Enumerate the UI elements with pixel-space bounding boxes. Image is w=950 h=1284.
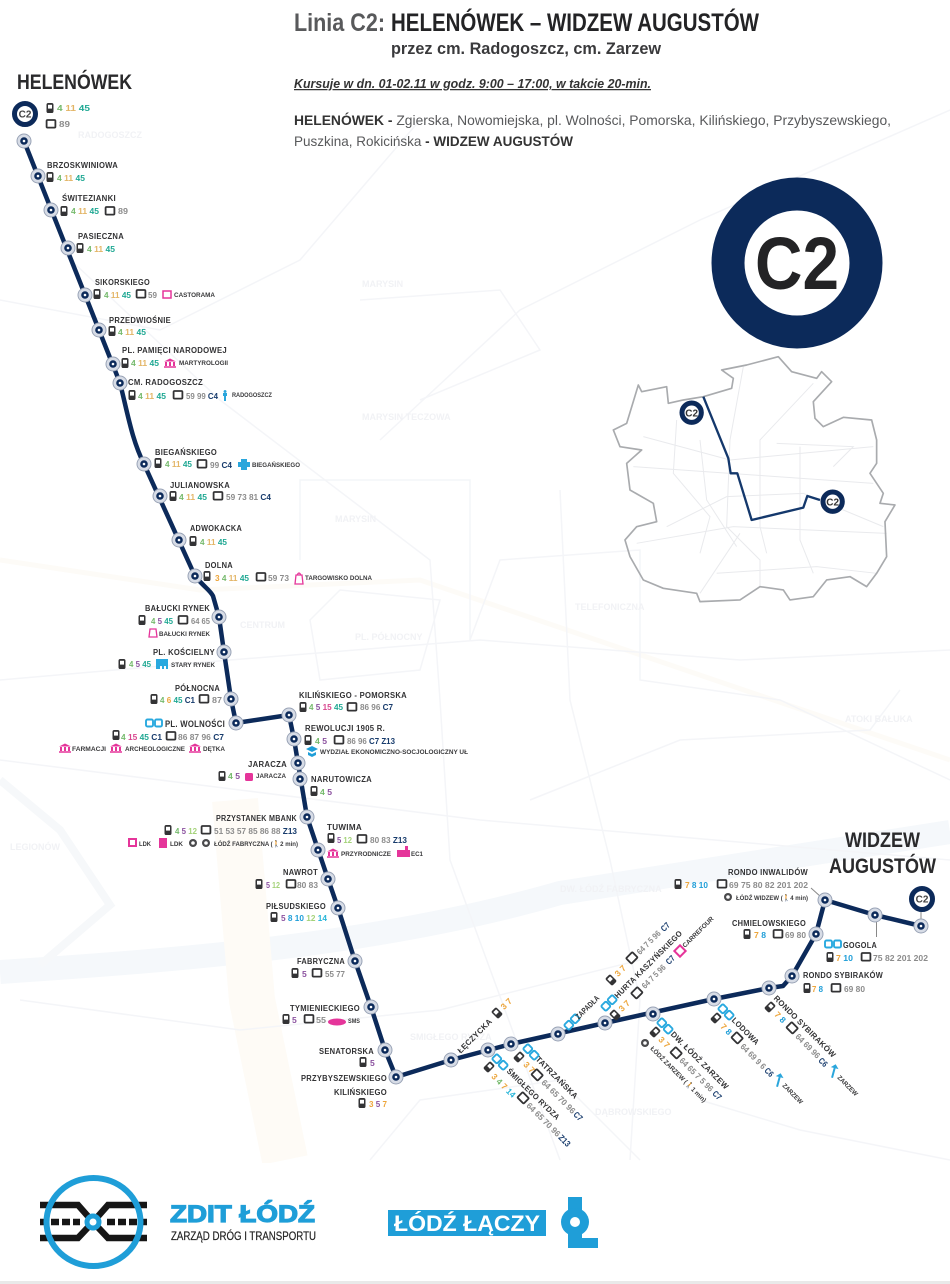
stop: Przedwiośnie: [92, 316, 171, 337]
ghost map labels: TELEFONICZNA: [575, 602, 645, 612]
stop: Lodowa: LODOWA: [730, 1016, 761, 1047]
stop: Tatrzańska: 64 65 70 96: [539, 1077, 578, 1116]
stop: Przybyszewskiego / Kilińskiego: PRZYBYSZEWSKIEGO: [301, 1074, 387, 1083]
stop: Cm. Radogoszcz: 59 99 C4: [186, 391, 218, 401]
stop: Tuwima: PRZYRODNICZE: [341, 851, 392, 858]
stop: Przystanek mBank: ŁÓDŹ FABRYCZNA (🚶2 min): [214, 839, 298, 848]
stop: Dolna: [188, 561, 372, 584]
stop: Fabryczna: 55 77: [325, 969, 345, 979]
stop: Rondo Sybiraków: 69 80: [844, 984, 865, 994]
stop: Śmigłego-Rydza: 3 4 7 14: [489, 1071, 518, 1100]
stop: Przystanek mBank: LDK: [170, 841, 183, 848]
stop: Śmigłego-Rydza: Z13: [556, 1132, 573, 1149]
stop: Północna: PÓŁNOCNA: [175, 684, 220, 693]
stop: Przystanek mBank: 4 5 12: [175, 826, 197, 836]
stop: Dw. Łódź Zarzew: 64 65 7 5 96: [677, 1055, 716, 1094]
stop: Tuwima: 5 12: [337, 835, 352, 845]
stop: Nawrot: NAWROT: [283, 868, 318, 877]
ghost map labels: ATOKI BAŁUKA: [845, 714, 913, 724]
stop: Senatorska: SENATORSKA: [319, 1047, 374, 1056]
stop: Pl. Wolności: PL. WOLNOŚCI: [165, 718, 225, 729]
stop: Rondo Sybiraków: RONDO SYBIRAKÓW: [803, 971, 883, 980]
city boundary: [613, 357, 895, 602]
title: HELENÓWEK – WIDZEW AUGUSTÓW: [391, 7, 759, 37]
stop: Jaracza: [218, 756, 305, 781]
stop: Narutowicza: NARUTOWICZA: [311, 775, 372, 784]
stop: Brzoskwiniowa: [31, 161, 118, 183]
stop: Świtezianki: 4 11 45: [71, 206, 99, 216]
stop: Rondo Inwalidów: RONDO INWALIDÓW: [728, 868, 808, 877]
stop: Lodowa: 7 8: [718, 1021, 734, 1037]
stop: Lodowa: ZARZEW: [781, 1083, 804, 1106]
stop: Chmielowskiego: [732, 919, 823, 941]
stop: Tymienieckiego: TYMIENIECKIEGO: [290, 1004, 360, 1013]
stop: Narutowicza: 4 5: [320, 787, 332, 797]
stop: Bałucki Rynek: 64 65: [191, 616, 210, 626]
stop: Lodowa: C6: [762, 1065, 776, 1079]
stop: Pl. Pamięci Narodowej: PL. PAMIĘCI NARODOWEJ: [122, 346, 227, 355]
stop: Kilińskiego - Pomorska: KILIŃSKIEGO - POMORSKA: [299, 691, 407, 700]
stop: Gogola: GOGOLA: [843, 941, 877, 950]
logo: Łódź Łączy: ŁÓDŹ ŁĄCZY: [394, 1211, 540, 1236]
stop: Rewolucji 1905 r.: [287, 724, 468, 757]
stop: Pasieczna: PASIECZNA: [78, 232, 124, 241]
mini badge end: C2: [826, 497, 839, 508]
stop: Bałucki Rynek: BAŁUCKI RYNEK: [145, 604, 210, 613]
stop: Gogola: 75 82 201 202: [873, 953, 928, 963]
stop: Brzoskwiniowa: BRZOSKWINIOWA: [47, 161, 118, 170]
stop: Pl. Kościelny: STARY RYNEK: [171, 662, 215, 669]
title: [294, 7, 759, 58]
stop: Cm. Radogoszcz: [113, 376, 272, 401]
stop: Tymienieckiego: [282, 1000, 378, 1026]
stop: Śmigłego-Rydza: 64 65 70 96: [524, 1100, 563, 1139]
stop: Pl. Wolności: [59, 716, 243, 753]
stop: Dw. Łódź Zarzew: C7: [710, 1088, 724, 1102]
stop: Tuwima: TUWIMA: [327, 823, 362, 832]
stop: Przybyszewskiego / Kilińskiego: 3 5 7: [369, 1099, 387, 1109]
terminus: Helenówek: 89: [59, 119, 70, 129]
ghost map labels: SMIGŁEGO RYDZA: [410, 1032, 492, 1042]
footer background: [0, 1163, 950, 1281]
stop: Dw. Łódź Zarzew: 3 7: [656, 1034, 672, 1050]
stop: Północna: 4 6 45 C1: [160, 695, 195, 705]
stop: Świtezianki: 89: [118, 206, 128, 216]
stop: Dolna: 59 73: [268, 573, 289, 583]
ghost map labels: MARYSIN: [362, 279, 403, 289]
stop: Zapadła: 3 7: [612, 963, 628, 979]
stop: Przystanek mBank: PRZYSTANEK MBANK: [216, 814, 297, 823]
ghost map labels: LEGIONÓW: [10, 841, 61, 852]
heading: Widzew Augustów: WIDZEW: [845, 829, 920, 852]
stop: Sikorskiego: CASTORAMA: [174, 292, 215, 299]
stop: Bałucki Rynek: BAŁUCKI RYNEK: [159, 631, 210, 638]
stop: Północna: [150, 684, 238, 706]
stop: Rewolucji 1905 r.: 4 5: [315, 736, 327, 746]
ghost map labels: CENTRUM: [240, 620, 285, 630]
stop: Tatrzańska: TATRZAŃSKA: [534, 1055, 580, 1101]
stop: Julianowska: 4 11 45: [179, 492, 207, 502]
stop: Tuwima: EC1: [411, 851, 423, 858]
stop: Nawrot: [256, 868, 335, 890]
stop: Pasieczna: 4 11 45: [87, 244, 115, 254]
stop: Piłsudskiego: [266, 901, 345, 923]
stop: Dw. Łódź Zarzew: [641, 1007, 730, 1104]
stop: Adwokacka: ADWOKACKA: [190, 524, 242, 533]
stop: Fabryczna: [292, 954, 362, 979]
stop: Biegańskiego: [137, 448, 300, 471]
heading: Widzew Augustów: [829, 829, 936, 878]
stop: Brzoskwiniowa: 4 11 45: [57, 173, 85, 183]
stop: Pl. Wolności: DĘTKA: [203, 746, 225, 753]
stop: Rondo Sybiraków (south): ZARZEW: [836, 1075, 859, 1098]
mini badge start: C2: [685, 408, 698, 419]
terminus: Widzew Augustów: C2: [916, 894, 929, 906]
stop: Przybyszewskiego / Kilińskiego: [301, 1070, 403, 1109]
stop: Świtezianki: [44, 194, 128, 217]
stop: Lodowa: 64 69 9 6: [738, 1041, 768, 1071]
stop: Świtezianki: ŚWITEZIANKI: [62, 194, 116, 203]
stop: Sikorskiego: 4 11 45: [104, 290, 131, 300]
stop: Piłsudskiego: PIŁSUDSKIEGO: [266, 902, 326, 911]
stop: Tatrzańska: [504, 1037, 585, 1123]
ghost map labels: PL. PÓŁNOCNY: [355, 631, 423, 642]
mini badge end: [823, 492, 842, 511]
stop: Gogola: [825, 908, 928, 963]
stop: Adwokacka: [172, 524, 242, 547]
stop: Rewolucji 1905 r.: 86 96 C7 Z13: [347, 736, 395, 746]
bottom edge: [0, 1281, 950, 1284]
logo mark: [40, 1178, 147, 1266]
route description: HELENÓWEK - Zgierska, Nowomiejska, pl. Wolności, Pomorska, Kilińskiego, Przybyszewskiego,: [294, 111, 891, 128]
ghost map labels: RADOGOSZCZ: [78, 130, 142, 140]
stop: Lodowa: [707, 992, 804, 1106]
stop: Zapadła: 64 7 5 96: [634, 928, 663, 957]
stop: Pl. Kościelny: PL. KOŚCIELNY: [153, 648, 215, 657]
stop: Gogola: 7 10: [836, 953, 853, 963]
stop: Tuwima: 80 83 Z13: [370, 835, 407, 845]
stop: Fabryczna: FABRYCZNA: [297, 957, 345, 966]
stop: Biegańskiego: 99 C4: [210, 460, 232, 470]
logo tagline: ZARZĄD DRÓG I TRANSPORTU: [171, 1230, 316, 1243]
stop: Pl. Kościelny: [118, 645, 231, 669]
stop: Julianowska: JULIANOWSKA: [170, 481, 230, 490]
logo wordmark: ZDIT ŁÓDŹ: [170, 1200, 315, 1228]
stop: Tatrzańska: 3 7: [521, 1059, 537, 1075]
stop: Dolna: 3 4 11 45: [215, 573, 249, 583]
logo: ZDiT Łódź: [40, 1178, 316, 1266]
stop: Łęczycka: ŁĘCZYCKA: [456, 1017, 494, 1055]
stop: Narutowicza: [293, 772, 372, 797]
stop: Rondo Sybiraków (south): [762, 981, 859, 1098]
stop: Sikorskiego: [78, 278, 215, 302]
stop: Przystanek mBank: LDK: [139, 841, 151, 848]
stop: Kilińskiego - Pomorska: 86 96 C7: [360, 702, 393, 712]
stop: Przystanek mBank: 51 53 57 85 86 88 Z13: [214, 826, 297, 836]
stop: Jaracza: JARACZA: [248, 760, 287, 769]
stop: Hurta Kaszyńskiego: 64 7 5 96: [639, 962, 668, 991]
stop: Rondo Inwalidów: 7 8 10: [685, 880, 708, 890]
stop: Tuwima: [311, 823, 423, 858]
stop: Pl. Wolności: ARCHEOLOGICZNE: [125, 746, 186, 753]
stop: Julianowska: 59 73 81 C4: [226, 492, 271, 502]
stop: Kilińskiego - Pomorska: [282, 691, 407, 722]
stop: Łęczycka: [444, 996, 514, 1067]
stop: Pl. Wolności: FARMACJI: [72, 746, 106, 753]
mini route line: [703, 397, 820, 520]
stop: Dolna: DOLNA: [205, 561, 233, 570]
stop: Julianowska: [153, 481, 271, 503]
stop: Jaracza: 4 5: [228, 771, 240, 781]
title: przez cm. Radogoszcz, cm. Zarzew: [391, 39, 662, 58]
stop: Bałucki Rynek: [138, 604, 226, 638]
stop: Jaracza: JARACZA: [256, 773, 286, 780]
stop: Piłsudskiego: 5 8 10 12 14: [281, 913, 327, 923]
stop: Chmielowskiego: 69 80: [785, 930, 806, 940]
stop: Biegańskiego: 4 11 45: [165, 459, 192, 469]
stop: Przedwiośnie: PRZEDWIOŚNIE: [109, 316, 171, 325]
big C2 badge: C2: [755, 222, 839, 305]
stop: Rondo Inwalidów: [674, 868, 832, 907]
stop: Rondo Sybiraków (south): 64 69 96: [793, 1031, 823, 1061]
stop: Łęczycka: 3 7: [498, 996, 514, 1012]
stop: Pl. Pamięci Narodowej: 4 11 45: [131, 358, 159, 368]
stop: Śmigłego-Rydza: ŚMIGŁEGO RYDZA: [505, 1067, 561, 1122]
stop: Rondo Inwalidów: 69 75 80 82 201 202: [729, 880, 808, 890]
terminus: Widzew Augustów: [912, 888, 932, 933]
stop: Biegańskiego: BIEGAŃSKIEGO: [252, 460, 300, 469]
mini badge start: [682, 403, 701, 422]
big C2 badge: [728, 194, 866, 332]
heading: Helenówek: HELENÓWEK: [17, 70, 132, 94]
route description: [294, 111, 891, 149]
stop: Kilińskiego - Pomorska: 4 5 15 45: [309, 702, 343, 712]
mini city map: [613, 357, 895, 602]
title: Linia C2:: [294, 9, 385, 37]
stop: Sikorskiego: SIKORSKIEGO: [95, 278, 150, 287]
stop: Fabryczna: 5: [302, 969, 307, 979]
terminus: Helenówek: C2: [19, 110, 32, 120]
stop: Rondo Sybiraków: [785, 969, 883, 994]
stop: Rondo Sybiraków (south): 7 8: [772, 1009, 788, 1025]
stop: Zapadła: C7: [658, 920, 672, 934]
stop: Rewolucji 1905 r.: WYDZIAŁ EKONOMICZNO-SOCJOLOGICZNY UŁ: [320, 749, 468, 756]
stop: Bałucki Rynek: 4 5 45: [151, 616, 173, 626]
ghost map labels: MARYSIN: [335, 514, 376, 524]
route description: Puszkina, Rokicińska - WIDZEW AUGUSTÓW: [294, 132, 574, 149]
ghost map labels: MARYSIN TECZOWA: [362, 412, 451, 422]
ghost map labels: DW. ŁÓDŹ FABRYCZNA: [560, 883, 662, 894]
stop: Tymienieckiego: 55: [316, 1015, 326, 1025]
stop: Hurta Kaszyńskiego: C7: [663, 953, 677, 967]
stop: Rondo Sybiraków (south): C6: [816, 1055, 830, 1069]
stop: Hurta Kaszyńskiego: HURTA KASZYŃSKIEGO: [613, 929, 684, 1000]
stop: Rewolucji 1905 r.: REWOLUCJI 1905 R.: [305, 724, 385, 733]
stop: Hurta Kaszyńskiego: [598, 915, 716, 1030]
terminus: Helenówek: 4 11 45: [57, 103, 90, 113]
stop: Sikorskiego: 59: [148, 290, 157, 300]
stop: Pl. Kościelny: 4 5 45: [129, 659, 151, 669]
stop: Pl. Wolności: 4 15 45 C1: [121, 732, 162, 742]
stop: Tymienieckiego: SMS: [348, 1018, 361, 1025]
stop: Cm. Radogoszcz: RADOGOSZCZ: [232, 392, 272, 399]
icon: Łódź Łączy symbol: [561, 1197, 598, 1248]
terminus: Helenówek: [14, 103, 90, 148]
stop: Zapadła: [551, 920, 672, 1041]
stop: Dw. Łódź Zarzew: ŁÓDŹ ZARZEW (🚶1 min): [649, 1044, 709, 1104]
stop: Północna: 87: [212, 695, 222, 705]
stop: Pl. Pamięci Narodowej: MARTYROLOGII: [179, 360, 228, 367]
route line: [24, 141, 921, 1077]
stop: Przedwiośnie: 4 11 45: [118, 327, 146, 337]
ghost map labels: [10, 130, 913, 1117]
stop: Rondo Sybiraków (south): RONDO SYBIRAKÓW: [772, 994, 838, 1060]
stop: Senatorska: 5: [370, 1058, 375, 1068]
stop: Chmielowskiego: CHMIELOWSKIEGO: [732, 919, 806, 928]
stop: Rondo Sybiraków: 7 8: [812, 984, 823, 994]
stop: Pl. Wolności: 86 87 96 C7: [178, 732, 224, 742]
stop: Hurta Kaszyńskiego: CARREFOUR: [682, 915, 716, 949]
stop: Pasieczna: [61, 232, 124, 255]
stop: Pl. Pamięci Narodowej: [106, 346, 228, 371]
logo: Łódź Łączy: [388, 1197, 598, 1248]
stop: Chmielowskiego: 7 8: [754, 930, 766, 940]
stop: Przybyszewskiego / Kilińskiego: KILIŃSKIEGO: [334, 1088, 387, 1097]
stop: Tymienieckiego: 5: [292, 1015, 297, 1025]
stop: Nawrot: 5 12: [266, 880, 280, 890]
stop: Hurta Kaszyńskiego: 3 7: [616, 998, 632, 1014]
stop: Śmigłego-Rydza: [481, 1043, 573, 1149]
stop: Zapadła: ZAPADŁA: [574, 994, 601, 1021]
stop: Rondo Inwalidów: ŁÓDŹ WIDZEW (🚶4 min): [736, 893, 808, 902]
stop: Nawrot: 80 83: [297, 880, 318, 890]
stop: Dw. Łódź Zarzew: DW. ŁÓDŹ ZARZEW: [669, 1030, 730, 1091]
stop: Cm. Radogoszcz: CM. RADOGOSZCZ: [128, 378, 203, 387]
stop: Dolna: TARGOWISKO DOLNA: [305, 575, 372, 582]
stop: Tatrzańska: C7: [571, 1109, 585, 1123]
stop: Cm. Radogoszcz: 4 11 45: [138, 391, 166, 401]
stop: Biegańskiego: BIEGAŃSKIEGO: [155, 448, 217, 457]
stop: Adwokacka: 4 11 45: [200, 537, 227, 547]
stop: Senatorska: [319, 1043, 392, 1068]
schedule note: Kursuje w dn. 01-02.11 w godz. 9:00 – 17:00, w takcie 20-min.: [294, 77, 651, 91]
stop: Przystanek mBank: [129, 810, 314, 848]
ghost map labels: DĄBROWSKIEGO: [595, 1107, 672, 1117]
